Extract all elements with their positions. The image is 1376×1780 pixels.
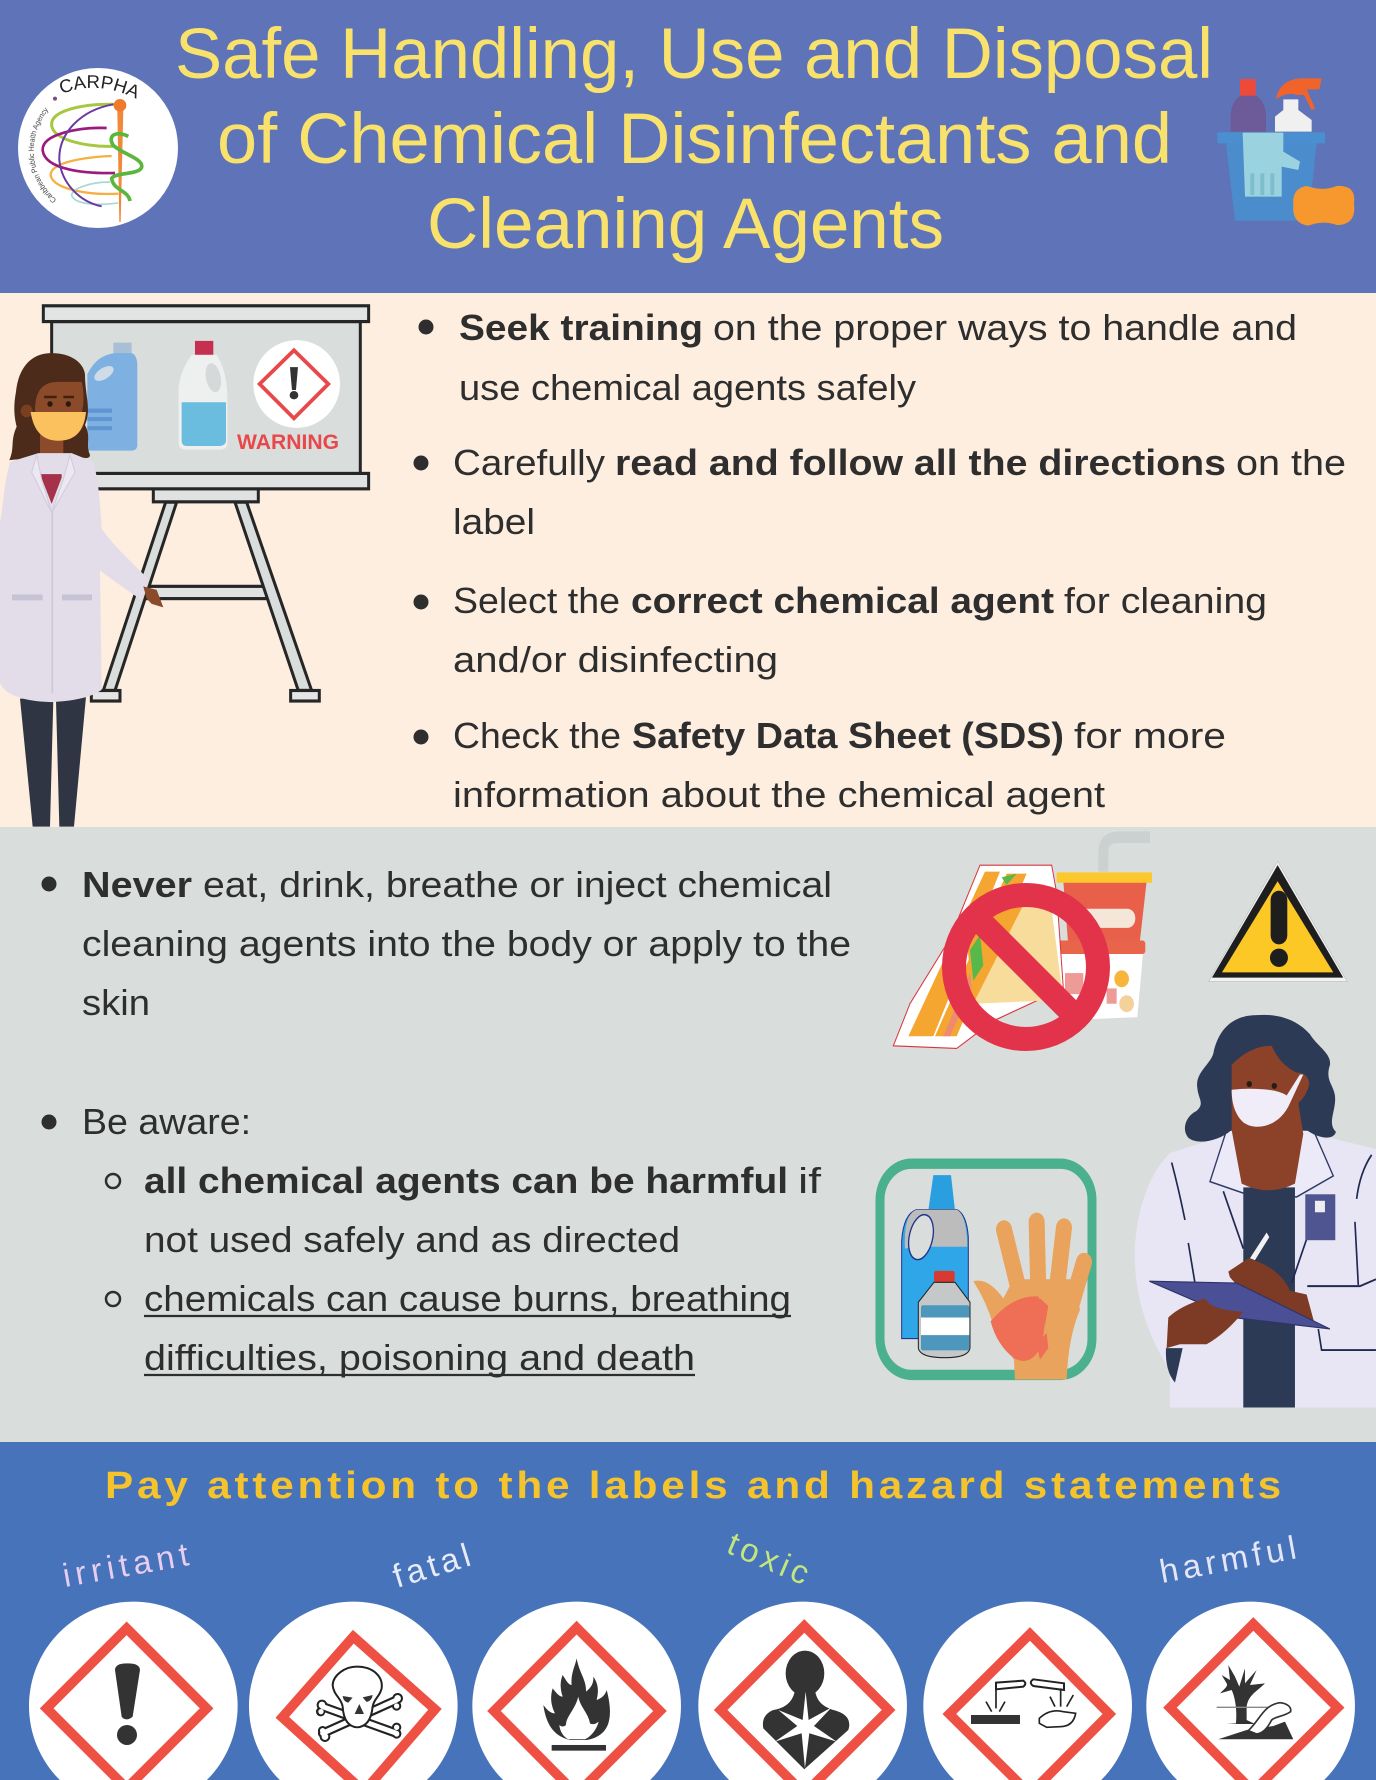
list: safety guidance: Select the [453, 580, 620, 621]
pictogram: health hazard [698, 1602, 907, 1780]
hand with burn [973, 1222, 1084, 1380]
panel: labels and hazard statements [0, 1442, 1376, 1780]
figure: presenter [0, 353, 163, 827]
list: safety guidance: Check the [453, 715, 621, 756]
list: safety guidance: Carefully [453, 442, 605, 483]
list: never and be aware: cleaning agents into the body or apply to the [82, 923, 851, 964]
list: safety guidance: Safety Data Sheet (SDS) [632, 715, 1064, 756]
label: harmful: harmful [1157, 1529, 1299, 1590]
label: irritant: irritant [60, 1535, 191, 1594]
list: never and be aware: eat, drink, breathe or inject chemical [203, 864, 832, 905]
icon: chemical skin burn [880, 1164, 1092, 1380]
icon: cleaning bucket [1217, 78, 1354, 226]
pictogram: environmental hazard [1146, 1602, 1355, 1780]
illustration: presenter at display board [0, 306, 369, 827]
list: never and be aware [42, 864, 851, 1378]
list: safety guidance: and/or disinfecting [453, 639, 778, 680]
panel: header [0, 0, 1376, 293]
list: safety guidance: for cleaning [1064, 580, 1267, 621]
label: fatal: fatal [388, 1536, 475, 1595]
title: of Chemical Disinfectants and [217, 100, 1172, 179]
logo wordmark: CARPHA [60, 75, 137, 99]
list: safety guidance: correct chemical agent [631, 580, 1054, 621]
pictogram: skull and crossbones [249, 1602, 458, 1780]
bottle: blue jug [87, 343, 137, 451]
icon: warning pictogram [253, 340, 340, 428]
figure: doctor with clipboard [1135, 1015, 1376, 1407]
heading: pay attention: Pay attention to the labels and hazard statements [105, 1465, 1285, 1507]
list: safety guidance: for more [1074, 715, 1226, 756]
panel: hazards warning [0, 827, 1376, 1442]
list: never and be aware: not used safely and as directed [144, 1219, 680, 1260]
icon: warning triangle [1209, 861, 1347, 981]
logo agency name: Caribbean Public Health Agency [28, 107, 56, 202]
label: toxic: toxic [722, 1524, 815, 1592]
list: safety guidance: on the proper ways to handle and [713, 307, 1297, 348]
icon: CARPHA logo [18, 68, 178, 228]
list: safety guidance: information about the chemical agent [453, 774, 1105, 815]
title [175, 15, 1213, 264]
list: never and be aware: skin [82, 982, 150, 1023]
label: warning: WARNING [237, 431, 339, 454]
icon: no food or drink [893, 837, 1152, 1048]
pictogram: flame [472, 1602, 681, 1780]
list: safety guidance: label [453, 501, 535, 542]
list: safety guidance: on the [1236, 442, 1346, 483]
list: safety guidance: read and follow all the directions [615, 442, 1226, 483]
title: Cleaning Agents [427, 185, 944, 264]
panel: training and labels [0, 293, 1376, 827]
list: never and be aware: Never [82, 864, 192, 905]
pictogram: corrosive [923, 1602, 1132, 1780]
list: safety guidance: use chemical agents safely [459, 367, 916, 408]
pictogram: exclamation [29, 1602, 238, 1780]
list: never and be aware: if [798, 1160, 822, 1201]
title: Safe Handling, Use and Disposal [175, 15, 1213, 94]
list: safety guidance [414, 307, 1346, 815]
list: never and be aware: difficulties, poisoning and death [144, 1337, 695, 1378]
bottle: white bottle with liquid [179, 341, 227, 450]
list: never and be aware: Be aware: [82, 1101, 251, 1142]
list: never and be aware: chemicals can cause burns, breathing [144, 1278, 791, 1319]
list: safety guidance: Seek training [459, 307, 703, 348]
list: never and be aware: all chemical agents can be harmful [144, 1160, 788, 1201]
